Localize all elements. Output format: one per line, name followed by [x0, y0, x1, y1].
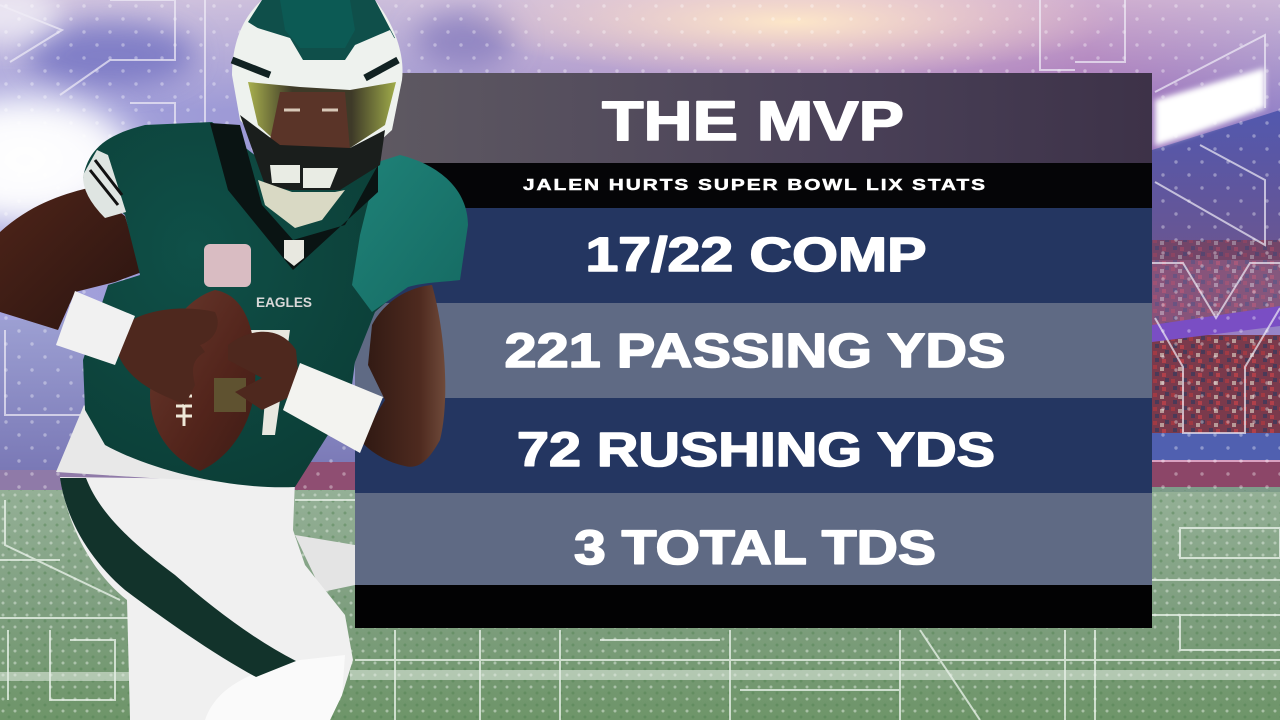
stat row: passing yards: [355, 303, 1152, 398]
facemask: [240, 115, 385, 190]
band above field: [0, 470, 360, 495]
white pants: [60, 477, 353, 720]
stat row: completions: 17/22 COMP: [586, 229, 926, 282]
subtitle band: [355, 163, 1152, 208]
football: [150, 290, 255, 471]
hands: [115, 309, 218, 405]
helmet wing marks: [232, 60, 398, 78]
stat row: total touchdowns: [355, 493, 1152, 585]
wrist tapes: [56, 291, 135, 365]
stat row: rushing yards: [355, 398, 1152, 493]
upper arm: [0, 188, 142, 330]
bright sleeve: [352, 155, 468, 312]
stat row: total touchdowns: 3 TOTAL TDS: [574, 522, 936, 575]
NFL shield: [284, 240, 304, 266]
panel: MVP stats board: [355, 73, 1152, 628]
breast patch: [204, 244, 251, 287]
rear leg: [295, 535, 355, 592]
player: quarterback in green jersey: [0, 0, 468, 720]
right stands: [1152, 110, 1280, 260]
ball laces: [176, 380, 192, 426]
stat row: completions: [355, 208, 1152, 303]
jersey number: [250, 330, 290, 435]
stat row: passing yards: 221 PASSING YDS: [504, 325, 1006, 378]
title: THE MVP: [602, 89, 904, 152]
bottom black band: [355, 585, 1152, 628]
stat row: rushing yards: 72 RUSHING YDS: [517, 424, 995, 477]
eyes: [284, 108, 338, 112]
helmet crown: [248, 0, 395, 62]
subtitle: JALEN HURTS SUPER BOWL LIX STATS: [523, 177, 987, 194]
title band: [355, 73, 1152, 163]
face: [270, 92, 350, 165]
undershirt: [56, 405, 230, 482]
left arm: [360, 285, 445, 467]
visor: [248, 82, 396, 148]
neck guard: [258, 180, 345, 228]
green jersey: [83, 122, 400, 487]
eagle patch: [83, 150, 126, 218]
collar: [210, 123, 378, 270]
jersey name: EAGLES: [256, 294, 312, 310]
ball logo: [214, 378, 246, 412]
helmet: [232, 0, 403, 150]
